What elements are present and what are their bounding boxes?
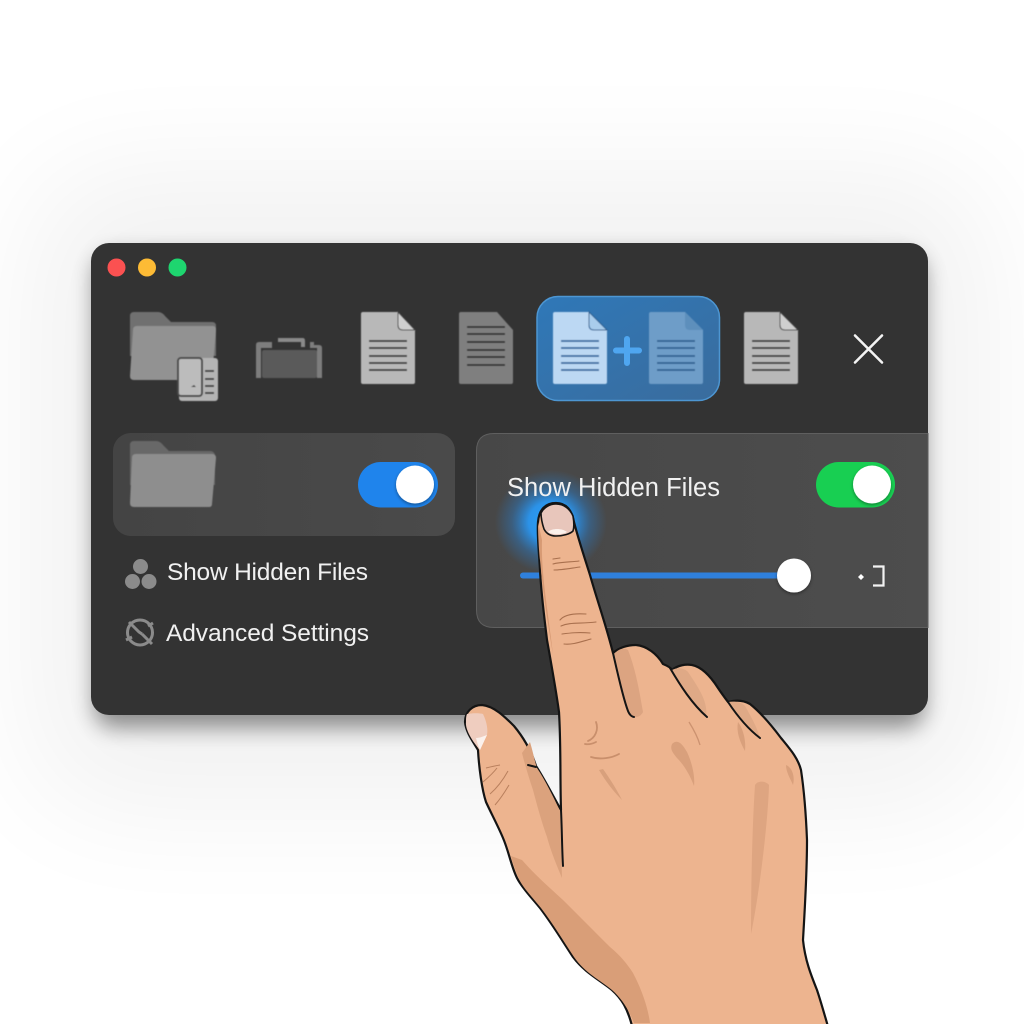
icon: faded document bbox=[649, 312, 703, 384]
slider bbox=[520, 558, 811, 592]
outline: thumb and index crease bbox=[528, 653, 760, 866]
icon: folder bbox=[130, 441, 216, 507]
toggle: blue bbox=[358, 462, 438, 508]
list item: show hidden files: Show Hidden Files bbox=[167, 559, 368, 586]
toggle: green bbox=[816, 462, 895, 508]
shadow: thumb side bbox=[522, 742, 562, 878]
panel: folder card bbox=[113, 433, 455, 536]
list item: advanced settings: Advanced Settings bbox=[166, 620, 369, 647]
shadow: finger creases bbox=[613, 649, 643, 717]
traffic light buttons bbox=[108, 258, 186, 276]
label: Show Hidden Files bbox=[507, 474, 720, 502]
index nail bbox=[541, 504, 574, 536]
tendon shadow bbox=[751, 782, 769, 934]
thumb nail bbox=[466, 713, 487, 750]
knuckle lines bbox=[585, 722, 619, 758]
shadow: palm edge bbox=[511, 856, 650, 1023]
panel: show hidden files settings bbox=[476, 434, 928, 628]
shadow: index finger left side bbox=[538, 522, 553, 655]
icon: close bbox=[855, 336, 882, 362]
touch glow bbox=[495, 470, 607, 574]
icon: bracket bbox=[858, 566, 884, 586]
icon: dark document bbox=[459, 312, 513, 384]
app window bbox=[91, 243, 928, 715]
icon: folder with document bbox=[130, 312, 218, 401]
thumb wrinkles bbox=[483, 765, 509, 805]
hand silhouette bbox=[465, 503, 829, 1024]
icon: plus bbox=[616, 339, 639, 363]
knuckle dimple bbox=[671, 742, 694, 786]
window drop shadow bbox=[94, 254, 925, 728]
icon: document bbox=[361, 312, 415, 384]
hand pointing bbox=[465, 503, 829, 1024]
icon: light document bbox=[553, 312, 607, 384]
icon: document right bbox=[744, 312, 798, 384]
icon: briefcase bbox=[256, 338, 322, 378]
icon: three dots bbox=[125, 559, 156, 589]
icon: gauge bbox=[126, 620, 153, 645]
selected merge button bbox=[537, 296, 720, 400]
wrinkles on index finger bbox=[553, 558, 596, 644]
